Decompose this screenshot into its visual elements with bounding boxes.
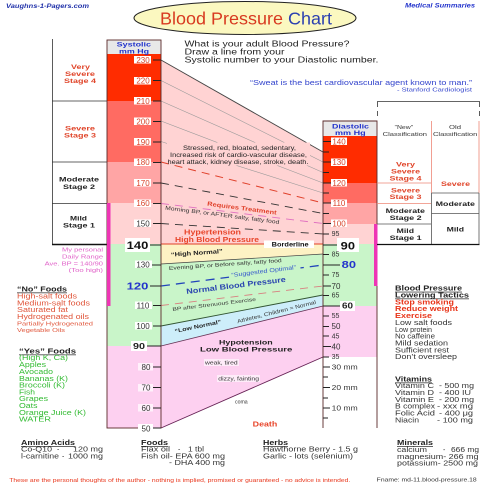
minerals list: calcium xyxy=(397,447,427,454)
instructions xyxy=(184,39,378,65)
vitamins list: Vitamin C xyxy=(395,383,434,390)
quote: “Sweat is the best cardiovascular agent known to man.” xyxy=(250,78,473,87)
right classification table: Old xyxy=(449,125,461,131)
athletes note: Athletes, Children = Normal xyxy=(237,300,317,325)
disclaimer: These are the personal thoughts of the author - nothing is implied, promised or guaranteed - no advice is intended. xyxy=(9,478,350,484)
borderline label xyxy=(264,240,314,249)
no foods list: “No” Foods xyxy=(17,286,67,294)
vitamins list: - 500 mg xyxy=(439,383,474,390)
personal daily range note xyxy=(45,248,103,274)
diastolic header: mm Hg xyxy=(335,130,366,137)
yes foods list: Orange Juice (K) xyxy=(19,410,86,417)
personal daily range note: Daily Range xyxy=(62,255,103,261)
amino acids list: 1000 mg xyxy=(68,454,103,460)
foods list xyxy=(141,440,225,467)
vitamins list: Vitamin D xyxy=(395,390,434,397)
systolic scale: 100 xyxy=(136,322,150,331)
lowering tactics list: Lowering Tactics xyxy=(395,292,469,300)
diastolic header: Diastolic xyxy=(332,123,369,130)
personal daily range note: (Too high) xyxy=(69,268,103,274)
instructions: Draw a line from your xyxy=(184,47,285,57)
right classification table: Mild xyxy=(447,227,464,234)
symptom labels: dizzy, fainting xyxy=(218,376,259,382)
quote: - Stanford Cardiologist xyxy=(397,88,472,94)
vitamins list: Vitamin E xyxy=(395,397,434,404)
herbs list: Garlic - lots (selenium) xyxy=(263,454,353,460)
right classification table: Stage 2 xyxy=(390,215,422,222)
vitamins list: - 100 mg xyxy=(437,418,473,424)
lowering tactics list: Low salt foods xyxy=(395,320,453,327)
diastolic scale: 70 xyxy=(332,282,341,291)
left stage classification: Stage 2 xyxy=(63,184,95,191)
vitamins list: - 200 mg xyxy=(439,397,474,404)
right classification table: Classification xyxy=(433,132,477,138)
amino acids list: l-carnitine xyxy=(21,454,59,460)
symptom note: Stressed, red, bloated, sedentary, xyxy=(183,146,296,152)
minerals list: potassium- 2500 mg xyxy=(397,461,478,468)
yes foods list xyxy=(19,348,86,424)
vitamins list: Vitamins xyxy=(395,376,432,384)
middle chart zones xyxy=(161,60,323,428)
hypotension heading: Hypotension xyxy=(219,340,273,347)
no foods list xyxy=(17,286,93,334)
systolic scale: 140 xyxy=(127,240,148,252)
symptom note: Increased risk of cardio-vascular disease, xyxy=(170,153,307,159)
systolic scale: 150 xyxy=(136,219,150,228)
right classification table: Severe xyxy=(391,187,420,194)
amino acids list: 120 mg xyxy=(73,446,103,454)
foods list: 1 tbl xyxy=(188,446,205,454)
foods list: - DHA 400 mg xyxy=(169,460,225,467)
diastolic column xyxy=(323,121,378,428)
systolic header: Systolic xyxy=(117,42,151,49)
yes foods list: “Yes” Foods xyxy=(19,348,76,356)
systolic header xyxy=(117,42,151,55)
systolic scale: 180 xyxy=(136,158,150,167)
lowering tactics list: Sufficient rest xyxy=(395,348,449,354)
yes foods list: WATER xyxy=(19,416,51,424)
amino acids list: Co-Q10 xyxy=(21,446,52,454)
symptom labels: weak, tired xyxy=(205,360,238,366)
foods list: Foods xyxy=(141,440,168,447)
morning note: Morning BP, or AFTER salty, fatty food xyxy=(165,206,280,226)
vitamins list: Niacin xyxy=(395,418,419,424)
high normal label: “High Normal” xyxy=(171,249,223,259)
diastolic scale: 100 xyxy=(332,219,346,228)
vitamins list: - xxx mg xyxy=(437,404,473,410)
diastolic scale: 50 xyxy=(332,322,341,331)
diastolic scale: 140 xyxy=(332,137,346,146)
diastolic scale: 80 xyxy=(342,260,357,271)
right classification table xyxy=(377,102,480,244)
systolic scale: 50 xyxy=(142,424,151,434)
quote xyxy=(250,78,473,94)
no foods list: Partially Hydrogenated xyxy=(17,322,93,328)
diastolic scale: 110 xyxy=(333,199,346,208)
left stage classification: Very xyxy=(71,64,90,71)
left stage classification xyxy=(52,39,107,244)
minerals list: - xyxy=(443,447,446,454)
hypertension heading xyxy=(175,228,259,244)
diastolic scale: 10 mm xyxy=(332,406,358,412)
vitamins list: - 400 IU xyxy=(439,390,471,397)
symptom labels xyxy=(204,359,260,406)
instructions: Systolic number to your Diastolic number. xyxy=(184,55,378,65)
left stage classification: Severe xyxy=(65,126,95,133)
right classification table: “New” xyxy=(395,125,413,131)
systolic scale: 160 xyxy=(136,199,150,208)
yes foods list: Bananas (K) xyxy=(19,376,68,383)
lowering tactics list: Stop smoking xyxy=(395,300,454,306)
lowering tactics list: Don’t oversleep xyxy=(395,354,457,361)
diastolic scale: 35 xyxy=(332,354,339,361)
vitamins list: Folic Acid xyxy=(395,410,435,418)
strenuous exercise note: BP after Strenuous Exercise xyxy=(172,297,257,313)
right classification table: Classification xyxy=(383,132,427,138)
yes foods list: Avocado xyxy=(19,369,53,376)
diastolic scale: 60 xyxy=(342,301,354,310)
systolic column xyxy=(107,40,161,434)
diastolic scale: 45 xyxy=(332,334,339,340)
personal daily range note: Ave. BP = 140/90 xyxy=(45,261,103,267)
personal daily range note: My personal xyxy=(62,248,103,254)
instructions: What is your adult Blood Pressure? xyxy=(184,39,350,49)
left stage classification: Stage 1 xyxy=(63,222,95,230)
systolic scale: 200 xyxy=(136,117,150,126)
symptom labels: coma xyxy=(235,400,248,406)
diastolic scale: 30 mm xyxy=(332,364,358,372)
diastolic scale: 120 xyxy=(332,179,346,188)
left stage classification: Severe xyxy=(65,71,95,78)
requires treatment label: Requires Treatment xyxy=(207,202,277,217)
minerals list: 666 mg xyxy=(451,447,479,454)
diastolic scale: 90 xyxy=(341,240,355,252)
lowering tactics list: Exercise xyxy=(395,313,432,320)
site name: Vaughns-1-Pagers.com xyxy=(6,3,89,10)
foods list: - xyxy=(178,446,181,454)
right classification table: Mild xyxy=(397,228,414,235)
lowering tactics list: Blood Pressure xyxy=(395,286,462,293)
amino acids list: - xyxy=(57,446,60,454)
yes foods list: Grapes xyxy=(19,396,49,403)
normal blood pressure: Normal Blood Pressure xyxy=(186,275,286,296)
systolic scale: 130 xyxy=(136,260,150,269)
minerals list: Minerals xyxy=(397,440,433,447)
no foods list: Hydrogenated oils xyxy=(17,314,90,321)
yes foods list: Oats xyxy=(19,403,38,410)
left stage classification: Moderate xyxy=(59,177,99,184)
right classification table: Stage 1 xyxy=(390,235,422,242)
no foods list: Saturated fat xyxy=(17,307,68,314)
systolic scale xyxy=(125,56,161,434)
left stage classification: Mild xyxy=(70,216,87,223)
lowering tactics list: Mild sedation xyxy=(395,340,448,348)
vitamins list: - 400 μg xyxy=(439,410,473,418)
left stage classification: Stage 3 xyxy=(64,133,96,140)
systolic scale: 210 xyxy=(136,97,150,106)
borderline label: Borderline xyxy=(272,242,309,249)
amino acids list: Amino Acids xyxy=(21,440,75,447)
diastolic scale xyxy=(323,137,359,418)
section label: Medical Summaries xyxy=(405,4,476,10)
title: Blood Pressure Chart xyxy=(160,8,332,28)
hypertension heading: High Blood Pressure xyxy=(175,235,259,244)
systolic daily range bar xyxy=(107,203,110,306)
symptom note: heart attack, kidney disease, stroke, death. xyxy=(168,160,309,166)
minerals list: magnesium- 266 mg xyxy=(397,454,479,461)
diastolic header xyxy=(332,123,369,137)
no foods list: High-salt foods xyxy=(17,294,78,300)
diastolic scale: 75 xyxy=(332,272,339,279)
diastolic scale: 65 xyxy=(332,292,339,300)
symptom note xyxy=(168,146,309,166)
herbs list xyxy=(263,440,358,460)
title xyxy=(134,2,356,34)
diastolic scale: 20 mm xyxy=(332,385,358,392)
suggested optimal: “Suggested Optimal” xyxy=(231,265,297,279)
systolic scale: 190 xyxy=(136,138,150,147)
left stage classification: Stage 4 xyxy=(64,78,96,85)
diastolic scale: 95 xyxy=(332,231,339,238)
yes foods list: Apples xyxy=(19,362,47,369)
yes foods list: Broccoli (K) xyxy=(19,382,65,390)
diastolic scale: 40 xyxy=(332,342,341,351)
hypertension heading: Hypertension xyxy=(184,228,241,237)
lowering tactics list xyxy=(395,286,469,361)
systolic scale: 120 xyxy=(127,281,149,292)
hypotension heading xyxy=(200,340,293,354)
lowering tactics list: No caffeine xyxy=(395,334,435,340)
amino acids list xyxy=(21,440,103,460)
death label: Death xyxy=(253,422,277,429)
herbs list: Hawthorne Berry - 1.5 g xyxy=(263,446,358,454)
right classification table: Severe xyxy=(391,169,420,176)
systolic scale: 170 xyxy=(136,179,150,188)
low normal label: “Low Normal” xyxy=(174,319,222,335)
diastolic scale: 55 xyxy=(332,313,339,320)
right classification table: Moderate xyxy=(386,208,425,215)
herbs list: Herbs xyxy=(263,440,288,447)
right classification table: Severe xyxy=(441,181,470,188)
evening note: Evening BP, or Before salty, fatty food xyxy=(169,258,282,272)
right classification table: Stage 3 xyxy=(390,194,422,201)
vitamins list: B complex xyxy=(395,404,436,410)
systolic scale: 70 xyxy=(142,383,151,392)
diastolic scale: 130 xyxy=(332,158,346,167)
yes foods list: (High K, Ca) xyxy=(19,355,68,362)
systolic scale: 60 xyxy=(142,404,151,413)
foods list: Fish oil- EPA 600 mg xyxy=(141,454,225,460)
lowering tactics list: Low protein xyxy=(395,327,432,334)
systolic scale: 110 xyxy=(137,301,150,310)
file name: Fname: md-11.blood-pressure.18 xyxy=(377,478,477,484)
foods list: Flax oil xyxy=(141,446,171,454)
diastolic daily range bar xyxy=(374,224,378,286)
minerals list xyxy=(397,440,479,468)
diastolic scale: 85 xyxy=(332,252,339,258)
no foods list: Vegetable Oils xyxy=(17,328,65,334)
systolic scale: 220 xyxy=(136,76,150,85)
lowering tactics list: Reduce weight xyxy=(395,306,459,313)
no foods list: Medium-salt foods xyxy=(17,300,91,308)
vitamins list xyxy=(395,376,474,424)
yes foods list: Fish xyxy=(19,390,35,396)
systolic scale: 90 xyxy=(133,342,146,351)
right classification table: Moderate xyxy=(436,201,475,208)
systolic scale: 230 xyxy=(136,56,150,65)
connecting lines xyxy=(161,60,323,428)
amino acids list: - xyxy=(62,454,65,460)
systolic header: mm Hg xyxy=(119,48,149,55)
right classification table: Very xyxy=(396,162,415,169)
right classification table: Stage 4 xyxy=(390,175,422,182)
systolic scale: 80 xyxy=(142,363,151,372)
hypotension heading: Low Blood Pressure xyxy=(200,347,293,354)
